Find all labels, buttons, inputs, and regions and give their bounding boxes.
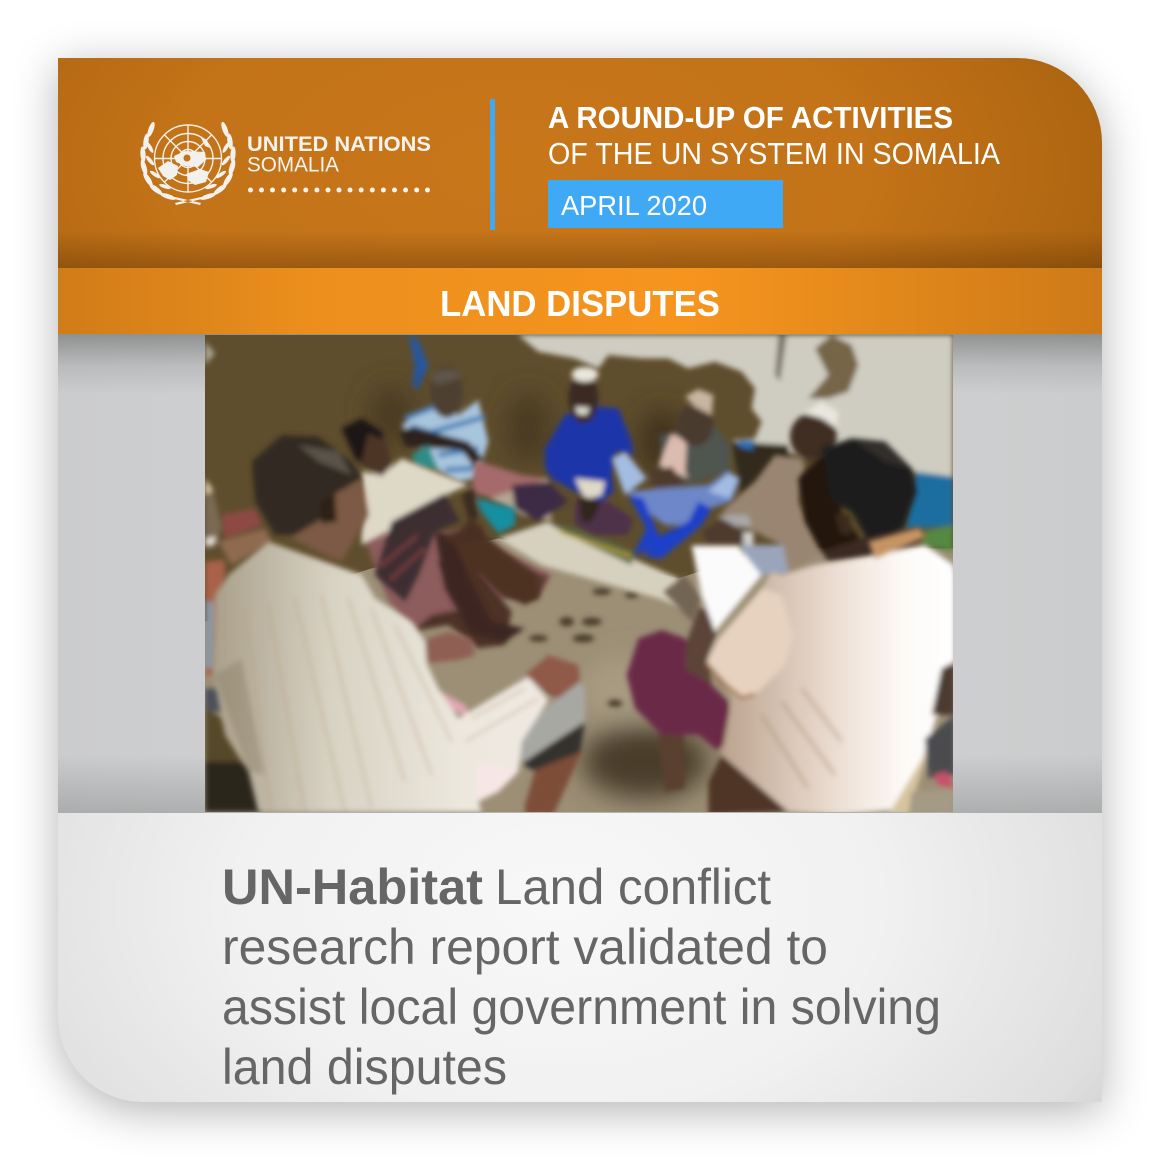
- floor specks: [529, 588, 638, 707]
- panel: caption background: [58, 813, 1102, 1102]
- man in tan jacket: [702, 402, 838, 575]
- panel: topic band background: [58, 268, 1102, 334]
- date badge box: [548, 180, 783, 228]
- left man's head: [252, 435, 368, 562]
- date badge text: APRIL 2020: [561, 190, 707, 221]
- vertical divider: [490, 99, 495, 230]
- man in cream shirt: [342, 418, 538, 642]
- caption line 1 regular: Land conflict: [495, 859, 771, 915]
- front left man's checked shirt: [213, 542, 585, 815]
- panel: photo backdrop: [58, 334, 1102, 813]
- caption line 3: assist local government in solving: [222, 979, 941, 1035]
- caption line 1 bold: UN-Habitat: [222, 859, 483, 915]
- panel: header background: [58, 58, 1102, 268]
- patterned rug and wrap: [472, 460, 568, 522]
- heading: round-up regular line: OF THE UN SYSTEM IN SOMALIA: [548, 136, 1000, 171]
- front right man's head: [798, 438, 925, 562]
- heading: round-up bold line: A ROUND-UP OF ACTIVITIES: [548, 100, 953, 135]
- man in blue shirt: [545, 367, 633, 535]
- text: SOMALIA: SOMALIA: [247, 154, 339, 176]
- rug and feet at lower left: [362, 532, 552, 648]
- caption line 4: land disputes: [222, 1039, 507, 1095]
- caption line 2: research report validated to: [222, 919, 828, 975]
- wall and floor: [205, 335, 953, 812]
- caption text: [222, 859, 941, 1095]
- dotted rule: [248, 188, 430, 192]
- man in grey sweater with blue trousers: [612, 389, 740, 558]
- icon: UN emblem: [139, 121, 237, 205]
- text: UNITED NATIONS: UNITED NATIONS: [247, 133, 431, 156]
- man in striped shirt: [400, 366, 488, 482]
- topic band title: LAND DISPUTES: [440, 283, 720, 324]
- front right man's shirt and paper: [627, 528, 955, 815]
- logo: United Nations Somalia: [140, 99, 1000, 324]
- partly visible person at left: [205, 478, 272, 812]
- photo: community meeting seated in a circle: [205, 335, 953, 812]
- mat on floor: [498, 522, 685, 608]
